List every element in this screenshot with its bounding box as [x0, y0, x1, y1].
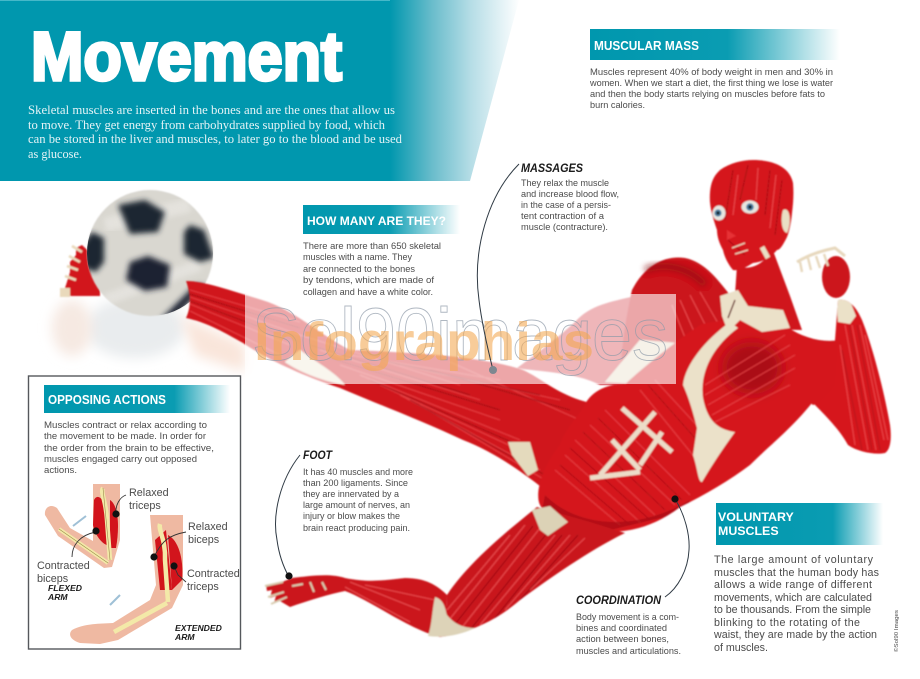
callout: foot [276, 448, 413, 580]
text: coordination: muscles and articulations. [576, 646, 681, 656]
pale tendons chest [683, 322, 738, 482]
panel: muscular mass [589, 29, 840, 110]
text: foot: It has 40 muscles and more [303, 467, 413, 477]
text: opposing actions: the movement to be made. In order for [44, 431, 206, 441]
text: voluntary muscles: waist, they are made by the action [713, 629, 877, 641]
leader line: foot [276, 455, 300, 580]
label: relaxed triceps: triceps [129, 500, 161, 512]
heading bar: muscular mass: MUSCULAR MASS [594, 39, 699, 53]
callout: massages [477, 161, 619, 374]
intro text: as glucose. [28, 147, 82, 161]
heading bar: voluntary muscles: MUSCLES [718, 524, 779, 538]
text: muscular mass: Muscles represent 40% of body weight in men and 30% in [590, 67, 833, 77]
text: how many: by tendons, which are made of [303, 275, 434, 285]
text: coordination: action between bones, [576, 634, 669, 644]
leader line: massages [477, 164, 519, 374]
heading bar: opposing actions: OPPOSING ACTIONS [48, 393, 166, 407]
head [710, 160, 793, 270]
heading bar: voluntary muscles: VOLUNTARY [718, 510, 794, 524]
intro text: Skeletal muscles are inserted in the bones and are the ones that allow us [28, 103, 395, 117]
text: voluntary muscles: The large amount of voluntary [714, 554, 874, 566]
text: muscular mass [589, 67, 833, 110]
label: flexed arm: FLEXED [48, 583, 82, 593]
credit: ©Sol90 Images [893, 610, 900, 652]
label: extended arm: ARM [174, 632, 195, 642]
text: massages: tent contraction of a [521, 211, 605, 221]
intro text [28, 103, 403, 161]
collar pale [720, 290, 790, 332]
text: foot: injury or blow makes the [303, 511, 400, 521]
panel: how many are they [303, 205, 460, 297]
text: opposing actions: the order from the brain to be effective, [44, 443, 214, 453]
intro text: can be stored in the liver and muscles, to later go to the blood and be used [28, 132, 403, 146]
leader line: coordination [665, 495, 689, 597]
text: muscular mass: burn calories. [590, 100, 645, 110]
heading bar: muscular mass [590, 29, 840, 60]
text: coordination: bines and coordinated [576, 623, 667, 633]
torso [538, 290, 838, 535]
hand [797, 248, 850, 298]
text: voluntary muscles: movements, which are calculated [714, 592, 872, 604]
label: relaxed biceps: biceps [188, 534, 220, 546]
panel: voluntary muscles [713, 503, 883, 654]
watermark: Infographias: Infographias [254, 312, 594, 372]
right arm and forearm [798, 298, 892, 455]
heading: coordination: COORDINATION [576, 593, 661, 607]
illustration: muscular body [186, 160, 891, 637]
motion smear under ball [52, 298, 245, 372]
forward arm and shoulder [517, 257, 738, 385]
text: muscular mass: women. When we start a diet, the first thing we lose is water [589, 78, 833, 88]
text: foot: brain react producing pain. [303, 523, 410, 533]
neck [722, 248, 802, 330]
text: massages: muscle (contracture). [521, 222, 608, 232]
text: opposing actions: muscles engaged carry out opposed [44, 454, 197, 464]
text: voluntary muscles: of muscles. [714, 642, 768, 654]
label: relaxed biceps: Relaxed [188, 521, 228, 533]
heading: foot: FOOT [303, 448, 334, 462]
text: massages: and increase blood flow, [521, 189, 619, 199]
lower leg and foot [265, 575, 475, 637]
text: coordination: Body movement is a com- [576, 612, 679, 622]
kicking leg [186, 281, 600, 490]
text: muscular mass: and then the body starts relying on muscles before fats to [590, 89, 825, 99]
text: how many: There are more than 650 skeletal [303, 241, 441, 251]
text: foot: they are innervated by a [303, 489, 400, 499]
text: massages: in the case of a persis- [521, 200, 611, 210]
illustration: soccer ball with motion blur [28, 160, 900, 656]
heading: massages: MASSAGES [521, 161, 583, 175]
icon: eyes [712, 200, 758, 220]
text: voluntary muscles: blinking to the rotating of the [714, 617, 860, 629]
watermark: Sol90images: Sol90images [252, 293, 668, 376]
intro text: to move. They get energy from carbohydrates supplied by food, which [28, 118, 386, 132]
text: voluntary muscles [713, 554, 879, 654]
heading bar: voluntary muscles [716, 503, 883, 545]
icon: flexed arm [45, 484, 120, 568]
text: foot: large amount of nerves, an [303, 500, 410, 510]
label: contracted triceps: Contracted [187, 568, 240, 580]
abdomen cross [590, 408, 672, 478]
label: contracted triceps: triceps [187, 581, 219, 593]
label: contracted biceps: Contracted [37, 560, 90, 572]
upper thigh and leg [440, 506, 625, 637]
icon: extended arm [70, 515, 183, 644]
text: voluntary muscles: muscles that the human body has [714, 567, 879, 579]
text: massages: They relax the muscle [521, 178, 609, 188]
header banner [0, 0, 519, 181]
watermark overlay [245, 293, 676, 384]
text: coordination [576, 612, 681, 656]
text: how many: are connected to the bones [303, 264, 415, 274]
label: relaxed triceps: Relaxed [129, 487, 169, 499]
text: how many: collagen and have a white color. [303, 287, 433, 297]
label: contracted biceps: biceps [37, 573, 69, 585]
text: how many: muscles with a name. They [303, 252, 412, 262]
label markers [72, 495, 186, 582]
text: opposing actions: Muscles contract or relax according to [44, 420, 207, 430]
text: voluntary muscles: allows a wide range of different [714, 579, 872, 591]
text: opposing actions [44, 420, 214, 475]
heading bar: how many [303, 205, 460, 234]
heading bar: how many: HOW MANY ARE THEY? [307, 214, 446, 228]
heading bar: opposing actions [44, 385, 230, 413]
title: Movement [31, 18, 342, 95]
label: flexed arm: ARM [47, 592, 68, 602]
text: how many [303, 241, 441, 297]
text: voluntary muscles: to be thousands. From the simple [714, 604, 871, 616]
text: massages [521, 178, 619, 232]
text: foot [303, 467, 413, 533]
text: foot: than 200 ligaments. Since [303, 478, 408, 488]
callout: coordination [576, 495, 689, 656]
icon: blurred foot behind ball [60, 245, 100, 297]
label: extended arm: EXTENDED [175, 623, 222, 633]
icon: ball [82, 190, 214, 320]
panel: opposing actions [28, 376, 240, 649]
text: opposing actions: actions. [44, 465, 77, 475]
